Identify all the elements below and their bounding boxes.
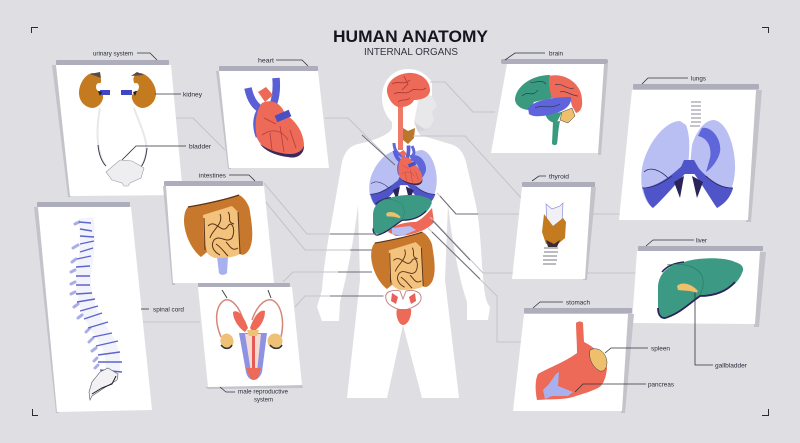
panel: brain xyxy=(491,59,608,155)
ureters xyxy=(97,108,146,166)
heart illustration xyxy=(248,78,304,158)
organ labels xyxy=(93,50,748,404)
human body silhouette xyxy=(317,69,490,398)
organ labels: male reproductive xyxy=(238,388,288,396)
bladder xyxy=(106,160,144,186)
spleen xyxy=(590,349,607,371)
organ labels: system xyxy=(254,396,273,404)
panel: thyroid xyxy=(512,182,596,280)
panel: intestines xyxy=(163,181,274,285)
organ labels: thyroid xyxy=(549,174,569,180)
thyroid illustration xyxy=(542,203,566,264)
trachea xyxy=(690,102,701,126)
organ labels: lungs xyxy=(691,76,707,82)
organ labels: brain xyxy=(549,50,563,58)
pancreas xyxy=(543,372,573,399)
body: lungs xyxy=(369,150,437,207)
title: HUMAN ANATOMY xyxy=(333,27,489,46)
organ labels: bladder xyxy=(189,144,212,150)
subtitle: INTERNAL ORGANS xyxy=(364,47,458,58)
organ labels: gallbladder xyxy=(715,362,748,370)
kidneys xyxy=(79,72,156,108)
connector lines xyxy=(143,82,636,342)
body: vessels xyxy=(394,143,414,157)
panel: liver xyxy=(632,246,766,327)
body: liver xyxy=(373,195,432,235)
spine illustration xyxy=(71,218,122,400)
panel: heart xyxy=(216,66,329,169)
body: pancreas xyxy=(392,226,416,236)
organ labels: spinal cord xyxy=(153,306,184,314)
body: spinal cord xyxy=(398,104,403,150)
organ labels: pancreas xyxy=(648,382,675,388)
body organs xyxy=(369,73,437,325)
reproductive illustration xyxy=(217,290,284,380)
panel: spinal cord xyxy=(34,202,152,413)
organ labels: kidney xyxy=(183,92,203,98)
body: reproductive system xyxy=(386,290,421,325)
panel: stomach xyxy=(513,308,634,413)
stomach illustration xyxy=(536,322,607,400)
body: heart xyxy=(394,146,422,185)
liver illustration xyxy=(658,258,743,318)
body: stomach xyxy=(388,208,434,236)
intestines illustration xyxy=(184,195,252,258)
label leader lines xyxy=(122,53,713,392)
organ labels: urinary system xyxy=(93,50,133,58)
organ labels: liver xyxy=(696,238,708,244)
rectum xyxy=(217,257,228,275)
organ labels: stomach xyxy=(566,300,590,306)
body: thyroid xyxy=(403,128,415,144)
panel: urinary system xyxy=(52,60,183,197)
lungs illustration xyxy=(641,120,735,208)
body: brain xyxy=(387,73,430,107)
organ labels: spleen xyxy=(651,346,670,352)
organ labels: intestines xyxy=(199,172,227,180)
body: intestines xyxy=(371,232,435,290)
brain illustration xyxy=(515,75,582,145)
panel: male reproductive system xyxy=(198,283,303,389)
panel: lungs xyxy=(619,84,762,222)
organ labels: heart xyxy=(258,58,274,64)
